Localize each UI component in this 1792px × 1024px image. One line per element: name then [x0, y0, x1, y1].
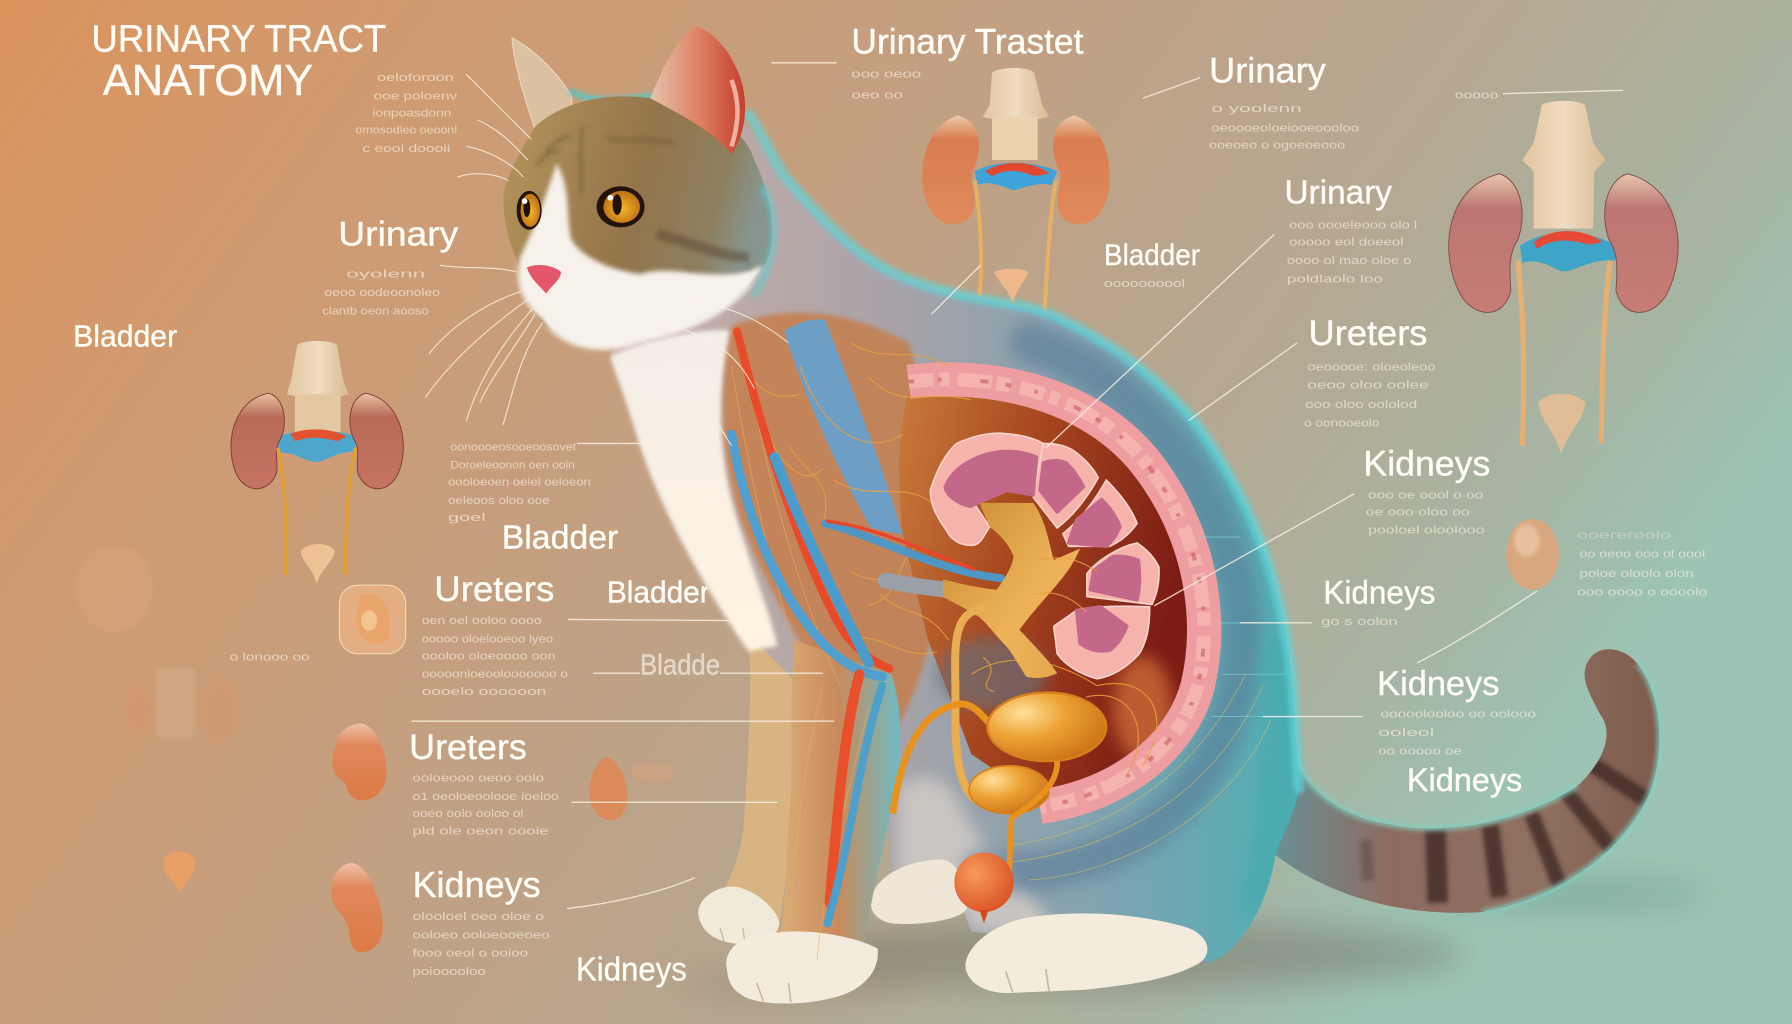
heading: title: URINARY TRACT [91, 17, 386, 59]
anatomy: pink muscle ring [909, 379, 1204, 807]
text block: urinary top right: ooeoeo o ogoeoeooo [1209, 140, 1345, 152]
text block: ureters centre: ooooonloeoolooooooo o [422, 669, 568, 681]
text block: near ear: omosodleo oeoonl [355, 125, 457, 137]
panel icon: rounded organ cell [339, 585, 406, 654]
text block: ureters right: oeoo oloo oolee [1307, 380, 1429, 392]
text block: egg organ right: poloe oloolo olon [1579, 568, 1694, 580]
text block: ureters lower: ooloeooo oeoo oolo [413, 773, 544, 785]
label: kidneys right 2: Kidneys [1323, 574, 1435, 610]
anatomy: nerves and contour lines [731, 343, 1291, 960]
label: urinary trastet: Urinary Trastet [851, 22, 1084, 62]
label: urinary mid right: Urinary [1285, 174, 1392, 211]
faint ghost bladder [163, 851, 195, 894]
text: faint note: o lonooo oo [230, 652, 310, 664]
label: urinary top right: Urinary [1209, 50, 1326, 90]
text block: near ear [355, 72, 458, 155]
text block: kidneys right 3: oo ooooo oe [1378, 745, 1462, 757]
cat: far front paw [698, 887, 779, 944]
anatomy: ureter [955, 608, 985, 802]
text block: kidneys lower left [413, 911, 550, 978]
label: ureters centre: Ureters [434, 569, 554, 609]
text block: egg organ right: ooo oooo o oooolo [1577, 586, 1707, 598]
text block: urinary left: clantb oeon aooso [322, 305, 429, 317]
anatomy: second ureter [893, 704, 1011, 814]
text block: urinary mid right: ooooo eol doeeol [1289, 237, 1403, 249]
heading: title [91, 17, 386, 105]
cat: right eye [597, 186, 645, 227]
cat: far front leg [714, 634, 800, 937]
cat: teal cheek glow [754, 189, 774, 295]
text block: near ear: ooe poloenv [374, 90, 458, 102]
anatomy: body cavity [899, 390, 1190, 797]
label: ureters right: Ureters [1309, 313, 1427, 353]
text block: centre left: oonoooeosooeoosovet [450, 441, 577, 453]
cat: left eye [517, 191, 542, 230]
diagram: top centre kidneys [922, 68, 1110, 309]
text: bladder caption: oooooooool [1104, 278, 1185, 290]
text block: urinary top right [1209, 103, 1359, 152]
cat: rear paw [965, 913, 1207, 993]
text block: top centre [851, 69, 921, 101]
text block: ureters centre: oooelo oooooon [422, 686, 546, 698]
text: top right note: ooooo [1455, 89, 1498, 101]
text block: ureters lower: ooeo oolo ooloo ol [413, 808, 523, 820]
text block: urinary left: oyolenn [346, 269, 425, 281]
leader lines [411, 63, 1623, 909]
cat: teal head rim [571, 91, 651, 100]
text block: ureters centre: ooooo oloelooeoo lyeo [422, 633, 553, 645]
text block: ureters lower: o1 oeoloeoolooe ioeloo [413, 791, 559, 803]
anatomy: blue band [784, 319, 903, 535]
text block: urinary left: oeoo oodeoonoleo [325, 287, 440, 299]
label: bladder centre 2: Bladder [607, 574, 710, 609]
text block: urinary left [322, 269, 440, 317]
cat: right ear [650, 26, 745, 154]
anatomy: bladder lower [969, 766, 1049, 814]
anatomy: orange lower cavity [1113, 656, 1173, 761]
text block: centre left: oooloeoen oelel oeloeon [448, 477, 591, 489]
icon: egg organ right [1506, 519, 1559, 590]
cat: lower flank teal [1251, 640, 1280, 914]
cat: near front paw [726, 931, 878, 1004]
cat: cheek stripe [657, 234, 754, 281]
text block: top centre: ooo oeoo [851, 69, 921, 81]
kidney medulla [945, 451, 1140, 651]
text: kidneys caption: go s oolon [1321, 616, 1398, 628]
text block: centre left: Doroeleoonon oen ooin [450, 460, 575, 472]
faint ghost cat and diagram [75, 545, 239, 851]
text block: kidneys lower left: poiooooloo [413, 966, 486, 978]
text block: urinary top right: o yoolenn [1211, 103, 1302, 115]
label: kidneys right 1: Kidneys [1363, 443, 1490, 483]
text block: urinary mid right: oooo ol mao oloe o [1287, 255, 1411, 267]
cat: dark flank band [983, 343, 1242, 872]
text block: near ear: ionpoasdonn [373, 108, 451, 120]
text block: centre left: oeleoos oloo ooe [448, 495, 550, 507]
text block: egg organ right: oo oeoo ooo ol oool [1579, 549, 1705, 561]
cat: white face [518, 163, 763, 350]
anatomy: lower cavity shade [937, 638, 1047, 711]
cat: tail [1275, 649, 1659, 913]
text block: ureters lower [413, 773, 559, 837]
text block: urinary mid right: ooo oooeleooo olo l [1289, 220, 1417, 232]
text block: kidneys right 1: ooo oe oool o oo [1368, 489, 1483, 501]
text block: kidneys right 3 [1378, 709, 1536, 757]
kidney pelvis [943, 503, 1080, 678]
anatomy: kidney [930, 433, 1159, 679]
label: ureters lower: Ureters [409, 727, 527, 767]
icon: kidney small 2 [331, 863, 383, 952]
text block: urinary mid right: poldlaolo loo [1287, 273, 1383, 285]
text block: kidneys right 1: oe ooo oloo oo [1366, 506, 1470, 518]
text block: ureters centre: oen oel ooloo oooo [422, 615, 542, 627]
label: kidneys bottom: Kidneys [576, 952, 687, 989]
anatomy: sphere organ [954, 853, 1014, 923]
kidney lobes [930, 433, 1159, 679]
text block: kidneys right 1 [1366, 489, 1485, 537]
label: kidneys right 3: Kidneys [1377, 665, 1499, 703]
cat: head [503, 96, 772, 344]
heading: title: ANATOMY [103, 57, 313, 105]
text block: ureters right: oeooooe: oloeoleoo [1307, 361, 1435, 373]
text block: centre left [448, 441, 591, 524]
anatomy: bladder upper [987, 693, 1106, 761]
cat: teal rim [749, 114, 1299, 789]
cat: left ear [512, 38, 572, 143]
text block: ureters lower: pld ole oeon oooie [413, 825, 549, 837]
cat: nose [527, 265, 561, 294]
diagram: top right kidneys [1449, 101, 1678, 454]
text block: ureters right: o oonooeolo [1304, 417, 1379, 429]
text block: kidneys right 3: ooleol [1378, 727, 1434, 739]
icon: kidney small faded [589, 757, 673, 820]
cat: body [610, 114, 1299, 962]
text block: kidneys right 3: ooooolooloo oo oolooo [1381, 709, 1536, 721]
text block: top centre: oeo oo [851, 89, 903, 101]
text block: egg organ right [1577, 529, 1707, 598]
text block: ureters right: ooo oloo oololod [1305, 399, 1417, 411]
label: bladder top: Bladder [1104, 239, 1200, 272]
label: bladder far left: Bladder [73, 318, 177, 353]
label: bladder centre: Bladder [502, 520, 618, 557]
cat: near front leg [777, 640, 900, 971]
text block: kidneys lower left: olooloel oeo oloe o [413, 911, 544, 923]
text block: centre left: goel [448, 512, 486, 524]
anatomy: blood vessels [731, 331, 1001, 923]
text block: ureters centre [422, 615, 568, 698]
cat: mid paw [871, 859, 967, 924]
anatomy: urethra [1009, 761, 1057, 874]
cat: whiskers [425, 74, 789, 446]
diagram: left kidneys, ureters and bladder [231, 341, 403, 584]
icon: kidney small 1 [332, 723, 387, 800]
cat: forehead stripes [537, 126, 674, 194]
text block: urinary mid right [1287, 220, 1417, 285]
cat: orange fascia [723, 313, 936, 754]
text block: near ear: c eooi doooii [362, 143, 450, 155]
label: kidneys right 4: Kidneys [1407, 762, 1522, 798]
text block: kidneys right 1: pooloel oloolooo [1368, 525, 1485, 537]
text block: egg organ right: ooereroolo [1577, 529, 1671, 541]
label: faded bladder: Bladde [640, 649, 720, 681]
label: kidneys lower left: Kidneys [413, 864, 541, 905]
text block: near ear: oeloforoon [377, 72, 454, 84]
cat: white chest [610, 330, 777, 651]
text block: kidneys lower left: ooloeo ooloeooeoeo [413, 929, 550, 941]
cat: pale belly [897, 777, 1057, 931]
label: urinary left: Urinary [338, 216, 459, 254]
floor shadow [674, 881, 1709, 999]
text block: ureters centre: oooloo oloeoooo oon [422, 650, 555, 662]
text block: kidneys lower left: fooo oeol o ooioo [413, 948, 528, 960]
text block: urinary top right: oeoooeoloeiooeoooloo [1211, 122, 1359, 134]
text block: ureters right [1304, 361, 1435, 429]
